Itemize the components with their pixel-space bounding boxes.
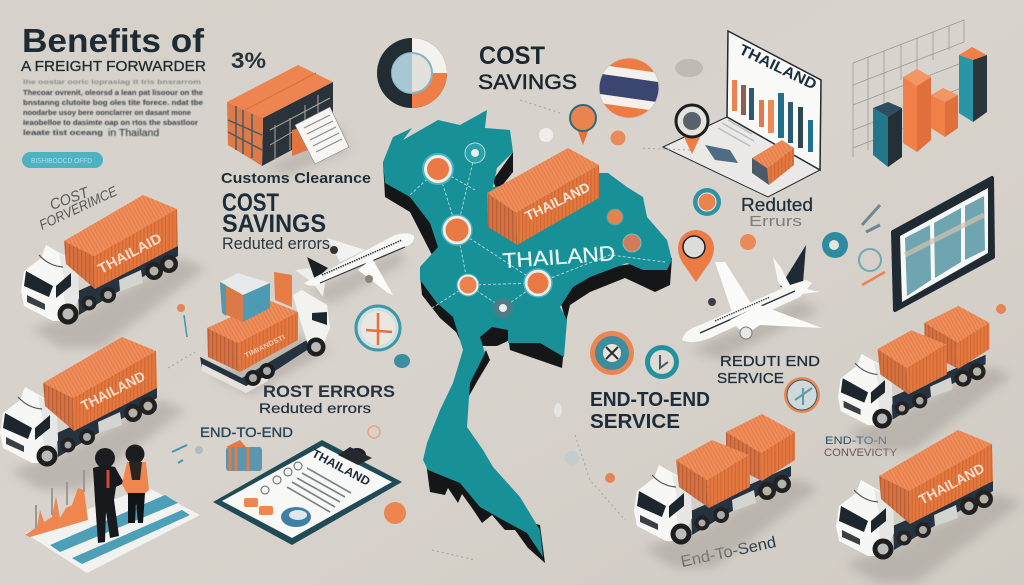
small container (752, 140, 794, 185)
board title: THAILAND (736, 41, 819, 93)
heading: cost savings top: COST (479, 42, 545, 70)
body paragraph: leaate tist oceang (23, 128, 103, 137)
clipboard (213, 440, 402, 545)
circle icons lower right of map (590, 331, 820, 413)
label: end-to-end left: END-TO-END (200, 424, 293, 440)
map of Thailand (383, 110, 672, 563)
label: reduted errors: Reduted errors (222, 234, 330, 253)
truck: lower left (0, 337, 185, 490)
truck: upper left (21, 195, 206, 348)
label: cost savings (222, 189, 326, 238)
label: end-to-n convevicty (824, 435, 898, 459)
map container: THAILAND (523, 179, 592, 224)
woman (122, 444, 149, 523)
rotated label: cost forverimce: FORVERIMCE (37, 182, 120, 233)
title block (21, 22, 206, 168)
map label: THAILAND (502, 242, 616, 273)
truck: two containers top right (838, 306, 1012, 451)
label: end-to-n convevicty: END-TO-N (825, 435, 887, 447)
map extrusion (383, 152, 672, 563)
pie chart icon (377, 38, 447, 108)
route dotted lines and scatter (168, 100, 690, 560)
truck: middle with stacked container: TIMIANDSTI (244, 334, 286, 360)
label: reduted errurs: Errurs (749, 213, 802, 230)
flag circle (598, 58, 660, 118)
people on data mat (25, 444, 200, 573)
body paragraph: Ieaobelloe to dasimte oap on rtos the sbastloor (23, 118, 198, 127)
body paragraph: bnstanng clutoite bog oles tite forece. ndat tbe (23, 98, 203, 107)
label: cost savings: SAVINGS (222, 210, 326, 238)
map nodes (423, 143, 641, 318)
body paragraph: noodarbe usoy bere oonclarrer on dasant mone (23, 108, 191, 117)
label: reduti end service: SERVICE (717, 370, 784, 387)
clipboard title: THAILAND (310, 446, 373, 489)
truck: middle with stacked container (200, 272, 330, 395)
subheading: A FREIGHT FORWARDER (21, 59, 206, 75)
rotated label: cost forverimce: COST (48, 184, 93, 214)
network lines (410, 153, 665, 308)
label: reduted errors lower: Reduted errors (259, 400, 371, 416)
chart grid (853, 20, 964, 157)
label: reduti end service: REDUTI END (720, 353, 820, 370)
small teal icon (394, 354, 410, 368)
location pin: dark ring (676, 105, 708, 154)
map land (383, 110, 672, 557)
button (22, 152, 103, 168)
man (93, 448, 124, 543)
label: end-to-end service: END-TO-END (590, 389, 710, 411)
label: reduti end service (717, 353, 820, 387)
body paragraph: Ihe oostar ooric loprasiag tt tris bnsrarrom (23, 79, 201, 86)
label: end-to-end service (590, 389, 710, 433)
small icons near pin (539, 128, 626, 146)
small scattered icons (177, 59, 1006, 483)
document (295, 107, 349, 164)
orange fin (274, 272, 292, 307)
chart board with container (663, 31, 821, 197)
label: reduted errurs (741, 195, 813, 230)
airplane: left (295, 233, 414, 305)
compass icon (356, 306, 400, 350)
truck: lower left: THAILAND (78, 368, 148, 414)
tablet (893, 178, 993, 310)
customs clearance container (227, 65, 350, 175)
3D bar chart (853, 20, 987, 167)
label: rost errors: ROST ERRORS (263, 382, 395, 401)
stat: 3%: 3% (231, 48, 266, 73)
body paragraph: Thecoar ovrenit, oleorsd a lean pat lisoour on the (23, 88, 203, 97)
label: reduted errurs: Reduted (741, 195, 813, 215)
heading: benefits of: Benefits of (22, 22, 205, 59)
label: end-to-end service: SERVICE (590, 411, 680, 433)
location pin: orange (678, 230, 714, 282)
heading: cost savings top (478, 42, 577, 94)
airplane: right (682, 245, 822, 360)
map container (487, 148, 599, 245)
truck: upper left: THAILAID (95, 230, 164, 277)
truck: two containers bottom middle (634, 414, 819, 568)
truck: bottom right (836, 430, 1021, 583)
location pin with orange tip (570, 105, 596, 145)
body paragraph (23, 79, 203, 139)
board bars (732, 80, 813, 152)
truck: bottom right: THAILAND (916, 460, 987, 508)
label: end-to-send: End-To-Send (679, 534, 778, 571)
body paragraph: in Thailand (108, 127, 159, 139)
label: cost savings: COST (222, 189, 279, 217)
label: end-to-n convevicty: CONVEVICTY (824, 447, 898, 459)
mini cargo icon (172, 440, 262, 471)
icons right of map (693, 188, 885, 285)
heading: cost savings top: SAVINGS (478, 71, 577, 94)
label: customs clearance: Customs Clearance (221, 170, 371, 187)
button: BISHIBOOCD OFFD (31, 158, 92, 165)
small orange icon (384, 502, 406, 524)
data mat (25, 470, 200, 573)
teal box (220, 273, 270, 322)
